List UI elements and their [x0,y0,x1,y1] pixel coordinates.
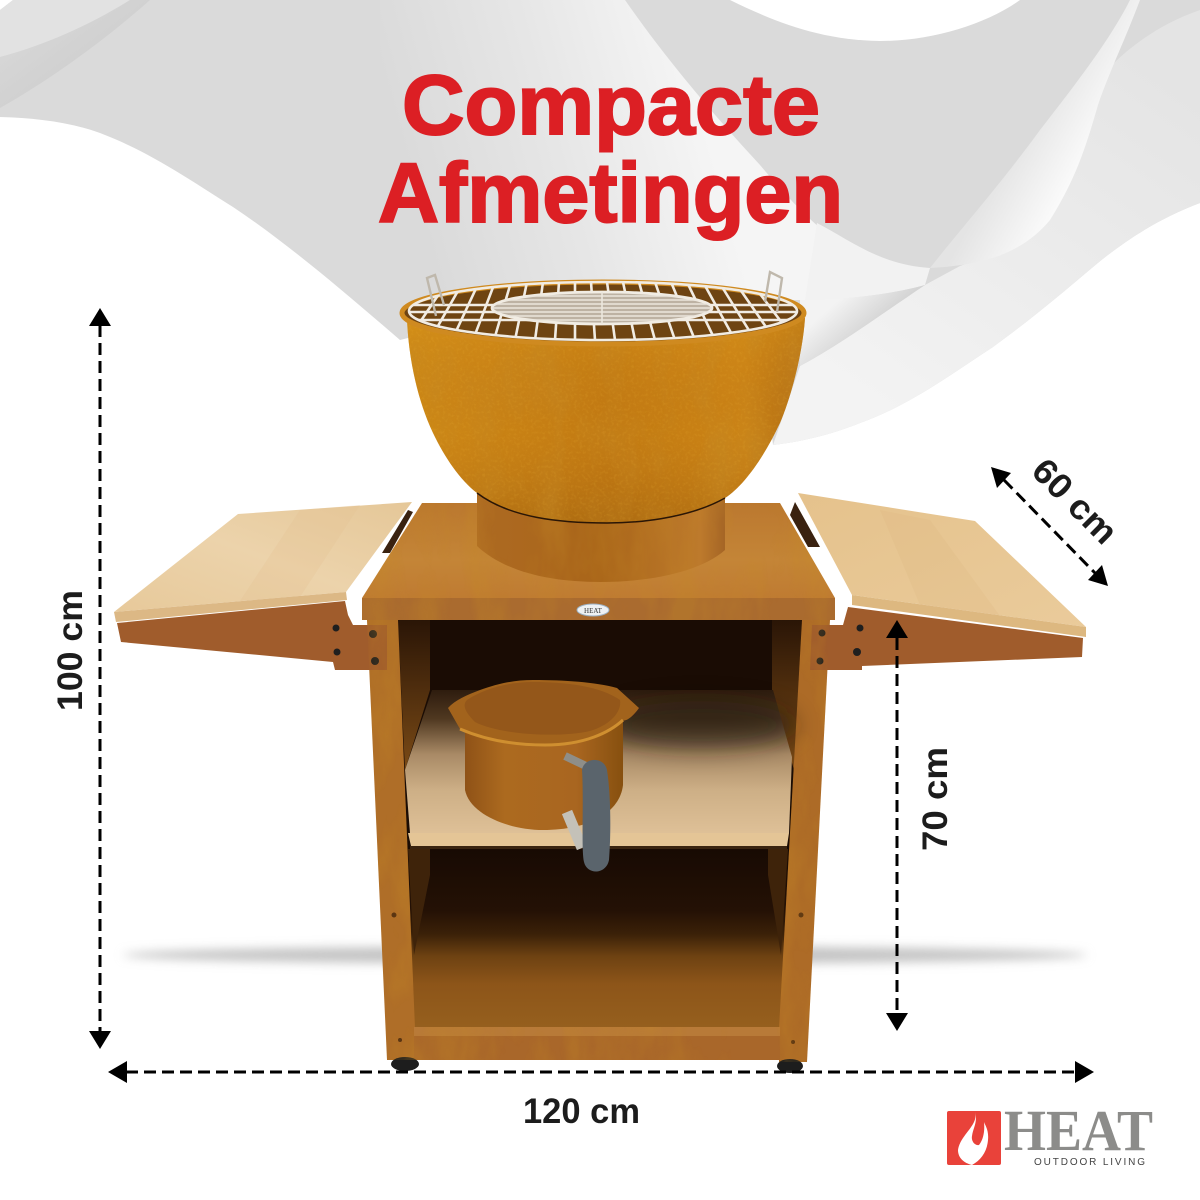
icon: flame [947,1111,1001,1165]
background: grey silk waves [0,0,1200,445]
grill grate [400,272,800,340]
title [378,58,843,240]
cabinet body [367,620,830,1073]
title: Compacte [402,58,820,152]
title: Afmetingen [378,146,843,240]
label: 120 cm: 120 cm [523,1092,640,1131]
dimension arrow: width 120 cm [108,1061,1094,1083]
product: fire bowl table [114,272,1086,1073]
wordmark: HEAT [1004,1098,1153,1163]
badge: heat logo on table: HEAT [584,607,603,615]
bowl pedestal ring [477,493,725,582]
floor shadow [123,946,1087,964]
left folding side table [114,502,413,670]
table top [362,503,835,620]
rust texture on metal [360,490,840,1065]
dimension arrow: depth 60 cm [991,467,1108,586]
fire bowl [400,282,810,530]
dimension arrow: height 70 cm [886,620,908,1031]
right folding side table [790,493,1086,670]
label: 70 cm: 70 cm [916,747,955,851]
wooden shelf [405,690,795,849]
ash pot [448,680,639,872]
dimension arrow: height 100 cm [89,308,111,1049]
label: 60 cm: 60 cm [1024,451,1125,552]
label: 100 cm: 100 cm [51,590,90,711]
logo: HEAT Outdoor Living [947,1098,1153,1168]
tagline: OUTDOOR LIVING [1034,1157,1145,1168]
badge: heat logo on table [577,604,609,616]
